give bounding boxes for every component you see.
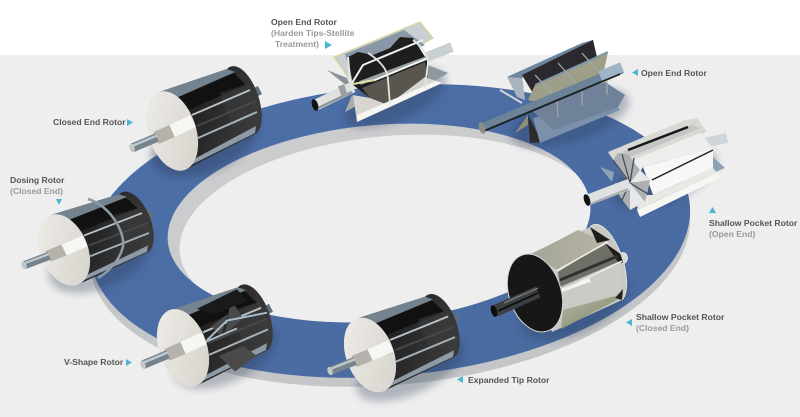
- label: shallow pocket rotor open end: Shallow Pocket Rotor: [709, 218, 798, 228]
- label: open end rotor hardened tips: (Harden Tips-Stellite: [271, 28, 355, 38]
- label: shallow pocket rotor open end: (Open End): [709, 229, 755, 239]
- label: v-shape rotor: V-Shape Rotor: [64, 357, 124, 367]
- rotor: open end: [477, 40, 636, 160]
- label: shallow pocket rotor open end: [709, 207, 798, 239]
- label: shallow pocket rotor closed end: (Closed End): [636, 323, 689, 333]
- label: expanded tip rotor: Expanded Tip Rotor: [468, 375, 550, 385]
- label: open end rotor hardened tips: Open End Rotor: [271, 17, 338, 27]
- label: open end rotor: Open End Rotor: [641, 68, 708, 78]
- label: dosing rotor: [10, 175, 65, 205]
- rotor: closed end: [128, 66, 271, 193]
- label: open end rotor hardened tips: [271, 17, 355, 49]
- rotor: open end hardened tips: [310, 22, 454, 140]
- ring platform: [92, 84, 690, 387]
- label: dosing rotor: Dosing Rotor: [10, 175, 65, 185]
- rotor: shallow pocket open end: [582, 118, 727, 221]
- rotor: expanded tip: [326, 294, 474, 415]
- label: closed end rotor: Closed End Rotor: [53, 117, 126, 127]
- rotor: v-shape: [139, 284, 287, 403]
- label: shallow pocket rotor closed end: Shallow Pocket Rotor: [636, 312, 725, 322]
- label: dosing rotor: (Closed End): [10, 186, 63, 196]
- label: open end rotor hardened tips: Treatment): [275, 39, 319, 49]
- rotor: dosing: [20, 192, 162, 308]
- label: shallow pocket rotor closed end: [626, 312, 725, 333]
- rotor: shallow pocket closed end: [489, 224, 639, 354]
